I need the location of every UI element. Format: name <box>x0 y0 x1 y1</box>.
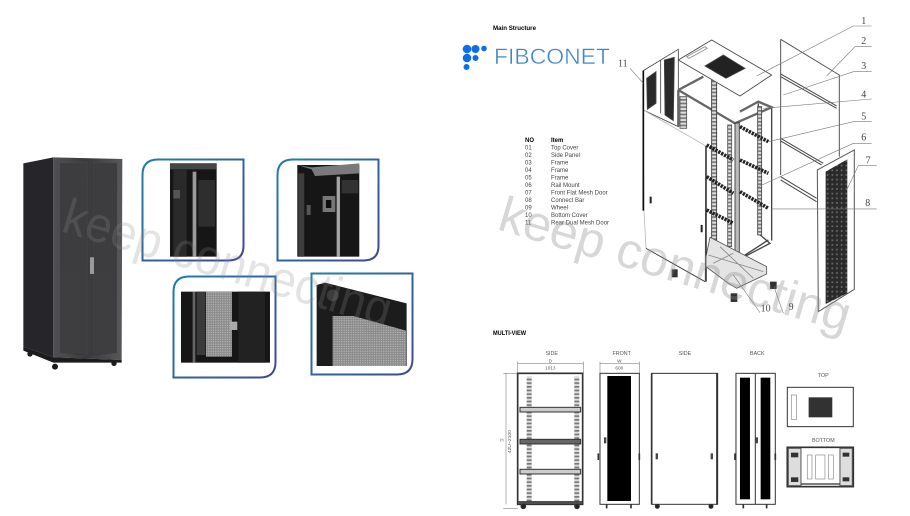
rear dual mesh door <box>643 49 678 127</box>
cabinet left mesh door <box>60 163 87 355</box>
table header: NO <box>525 138 534 144</box>
inset 2 frame <box>278 160 378 260</box>
cabinet door handle <box>90 257 94 274</box>
side panel <box>643 71 706 282</box>
parts table: 02 <box>525 153 532 159</box>
part numbers: 7 <box>866 155 871 166</box>
back view <box>735 373 775 508</box>
detail inset 3 <box>174 276 276 378</box>
parts table: Rear Dual Mesh Door <box>551 220 609 226</box>
view labels: BACK <box>750 351 765 357</box>
top cover <box>678 40 772 96</box>
parts table: 11 <box>525 220 532 226</box>
part numbers: 3 <box>861 61 866 72</box>
view labels <box>500 351 835 453</box>
inset 1 photo <box>170 163 217 257</box>
cabinet front door frame <box>53 157 122 360</box>
inset 1 frame <box>142 160 244 260</box>
front mesh door <box>817 150 854 312</box>
parts table: Top Cover <box>551 146 578 152</box>
part numbers: 6 <box>861 133 866 144</box>
logo: FIBCONET <box>463 44 610 70</box>
frame <box>678 77 772 263</box>
detail inset 4 <box>312 274 412 374</box>
part numbers: 2 <box>861 36 866 47</box>
leader lines <box>630 26 877 313</box>
bottom view <box>787 447 853 487</box>
side view open frame <box>518 373 583 509</box>
parts table: 04 <box>525 168 532 174</box>
part numbers: 11 <box>618 59 628 70</box>
view labels: BOTTOM <box>812 438 835 444</box>
view labels: W <box>617 359 622 364</box>
exploded diagram <box>618 16 877 314</box>
dimension lines <box>503 362 639 508</box>
part numbers: 8 <box>865 198 870 209</box>
view labels: TOP <box>818 373 829 379</box>
part numbers: 1 <box>861 16 866 27</box>
table header: Item <box>551 138 563 144</box>
bottom cover <box>706 237 767 288</box>
part numbers: 10 <box>761 303 771 314</box>
inset 3 frame <box>174 276 276 378</box>
cabinet base and wheels <box>23 347 122 370</box>
parts table: 07 <box>525 190 532 196</box>
inset 2 photo <box>297 163 359 257</box>
view labels: FRONT <box>612 351 632 357</box>
parts table: Rail Mount <box>551 183 580 189</box>
side view closed <box>652 373 718 508</box>
watermark left: keep connecting <box>57 188 399 338</box>
heading: multi-view: MULTI-VIEW <box>493 331 526 337</box>
parts table: Frame <box>551 176 569 182</box>
parts table: 01 <box>525 146 532 152</box>
logo wordmark: FIBCONET <box>494 44 610 69</box>
detail inset 1 <box>142 160 244 260</box>
view labels: D <box>549 359 553 364</box>
multi-view drawings <box>500 351 853 509</box>
parts table: Frame <box>551 168 569 174</box>
front view <box>598 373 639 508</box>
view labels: SIDE <box>545 351 558 357</box>
wheels <box>672 269 777 302</box>
top view <box>787 387 853 427</box>
view labels: 600 <box>615 366 624 371</box>
parts table <box>525 138 609 226</box>
parts table: Frame <box>551 160 569 166</box>
part numbers <box>618 16 871 314</box>
cabinet photo <box>23 157 122 370</box>
logo dots <box>463 45 487 70</box>
view labels: SIDE <box>679 351 692 357</box>
parts table: 08 <box>525 198 532 204</box>
inset 4 frame <box>312 274 412 374</box>
parts table: 09 <box>525 206 532 212</box>
parts table: Wheel <box>551 206 568 212</box>
part numbers: 9 <box>789 302 794 313</box>
cabinet right mesh door <box>92 163 117 355</box>
view labels: H <box>500 437 504 442</box>
part numbers: 4 <box>861 89 866 100</box>
inset 4 photo <box>317 283 407 366</box>
parts table: Bottom Cover <box>551 213 588 219</box>
parts table: Front Flat Mesh Door <box>551 190 608 196</box>
view labels: 42U~2100 <box>507 430 513 453</box>
parts table: 03 <box>525 160 532 166</box>
parts table: 06 <box>525 183 532 189</box>
heading: main structure: Main Structure <box>493 25 536 32</box>
cabinet side face <box>23 157 53 357</box>
view labels: 1013 <box>545 366 556 371</box>
table header <box>525 138 563 144</box>
part numbers: 5 <box>861 111 866 122</box>
parts table: 10 <box>525 213 532 219</box>
inset 3 photo <box>181 292 270 363</box>
parts table: Side Panel <box>551 153 580 159</box>
parts table: 05 <box>525 176 532 182</box>
right side panel with bars <box>781 39 839 202</box>
watermark right: keep connecting <box>493 186 858 343</box>
parts table: Connect Bar <box>551 198 584 204</box>
detail inset 2 <box>278 160 378 260</box>
